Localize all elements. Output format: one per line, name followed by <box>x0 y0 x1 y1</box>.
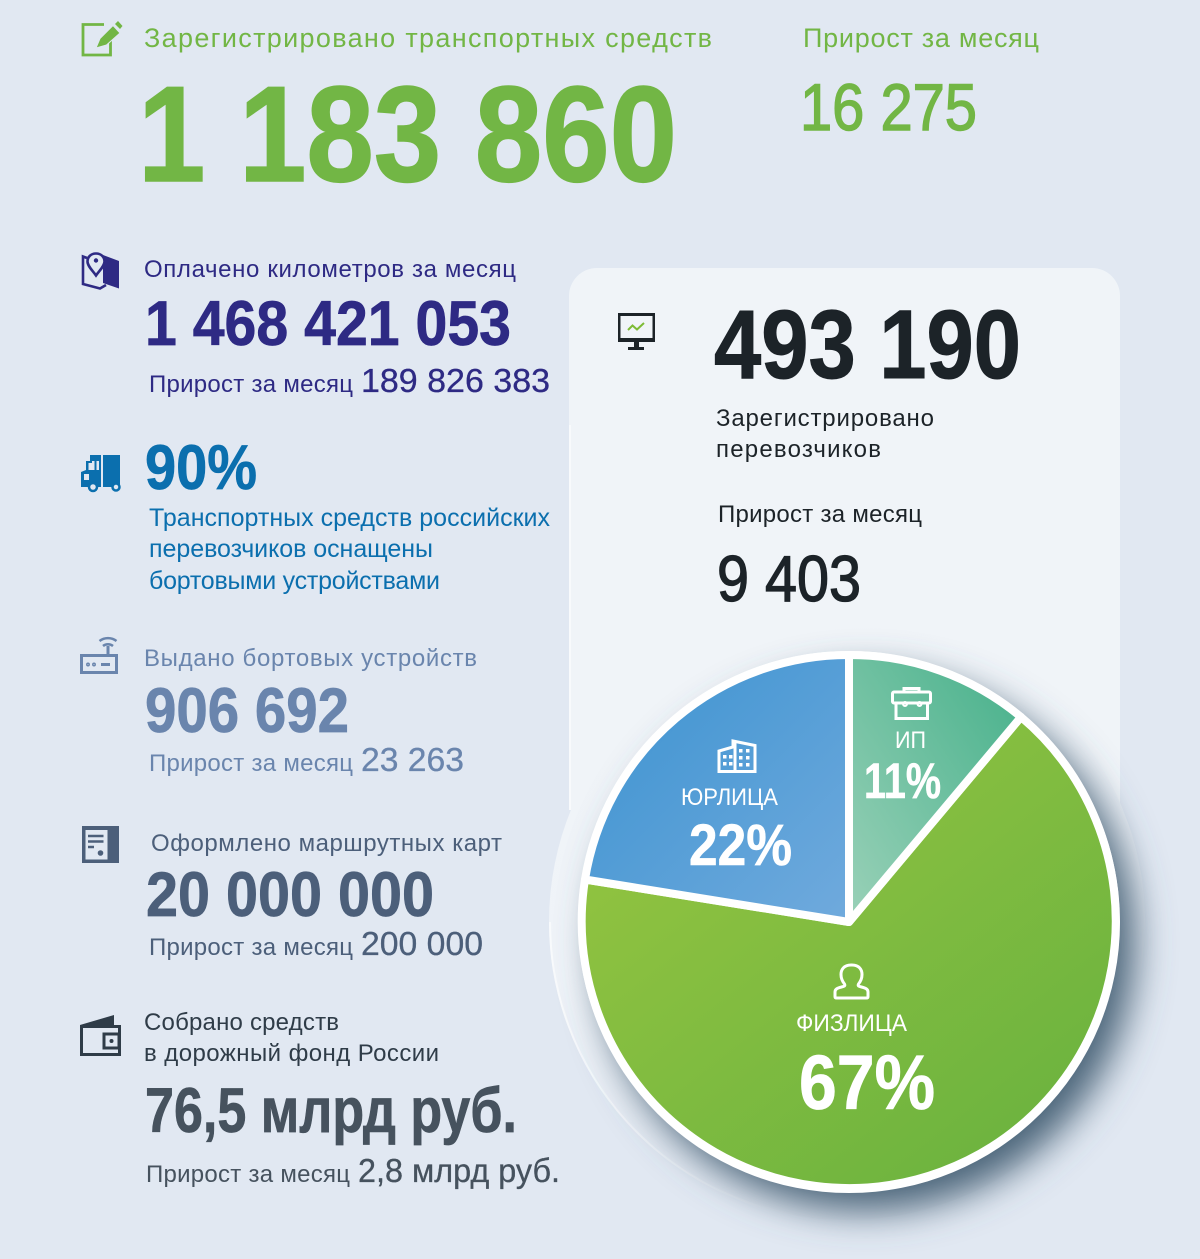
heading: carriers monthly growth: Прирост за месяц <box>718 501 922 528</box>
icon: person <box>835 965 868 998</box>
text: kilometers growth <box>149 362 550 399</box>
number: physical persons: 67% <box>799 1040 935 1126</box>
number: carriers monthly growth: 9 403 <box>717 542 861 615</box>
text: devices growth <box>149 741 464 778</box>
icon: monitor with chart <box>618 313 655 350</box>
icon: map with pin <box>83 254 119 288</box>
text: route cards growth: 200 000 <box>361 925 483 962</box>
text: road fund heading <box>144 1009 439 1067</box>
text: road fund growth: Прирост за месяц <box>146 1161 350 1188</box>
label: physical persons: ФИЗЛИЦА <box>796 1010 907 1037</box>
halo behind pie <box>549 624 1145 1220</box>
text: road fund heading: в дорожный фонд России <box>144 1040 439 1067</box>
icon: pencil and checkbox <box>83 21 122 55</box>
text: equipped description: Транспортных средств российских <box>149 504 550 532</box>
number: equipped share: 90% <box>145 433 257 503</box>
heading: paid kilometers: Оплачено километров за месяц <box>144 256 516 283</box>
icon: wallet <box>80 1015 120 1054</box>
text: devices growth: 23 263 <box>361 741 464 778</box>
number: legal entities: 22% <box>689 813 792 878</box>
text: registered carriers label: Зарегистрировано <box>716 405 934 432</box>
icon: router with wifi <box>82 638 116 672</box>
text: kilometers growth: Прирост за месяц <box>149 371 353 398</box>
number: paid kilometers: 1 468 421 053 <box>145 289 511 359</box>
text: devices growth: Прирост за месяц <box>149 750 353 777</box>
heading: registered vehicles: Зарегистрировано транспортных средств <box>144 23 712 53</box>
label: sole proprietors: ИП <box>895 727 926 754</box>
slice: legal entities <box>585 655 849 922</box>
text: route cards growth: Прирост за месяц <box>149 934 353 961</box>
number: road fund: 76,5 млрд руб. <box>145 1076 517 1146</box>
panel: carriers <box>569 268 1120 810</box>
icon: route document <box>82 826 119 863</box>
text: equipped description: бортовыми устройствами <box>149 567 440 595</box>
number: registered vehicles: 1 183 860 <box>138 58 677 210</box>
icon: buildings <box>719 741 755 772</box>
text: road fund growth: 2,8 млрд руб. <box>358 1152 560 1189</box>
pie white base <box>578 651 1120 1193</box>
text: registered carriers label: перевозчиков <box>716 436 881 463</box>
slice: physical persons <box>582 717 1116 1188</box>
heading: vehicles monthly growth: Прирост за месяц <box>803 23 1039 53</box>
number: registered carriers: 493 190 <box>714 290 1021 399</box>
text: kilometers growth: 189 826 383 <box>361 362 550 399</box>
number: issued devices: 906 692 <box>145 676 349 746</box>
number: route cards: 20 000 000 <box>146 860 434 930</box>
label: legal entities: ЮРЛИЦА <box>681 784 778 811</box>
number: vehicles monthly growth: 16 275 <box>800 70 977 144</box>
chart: carrier types pie <box>549 624 1145 1220</box>
text: road fund heading: Собрано средств <box>144 1009 339 1036</box>
slice: sole proprietors <box>849 655 1021 922</box>
heading: issued devices: Выдано бортовых устройств <box>144 645 477 672</box>
text: road fund growth <box>146 1152 560 1189</box>
text: equipped description: перевозчиков оснащены <box>149 535 433 563</box>
text: registered carriers label <box>716 405 934 463</box>
icon: briefcase <box>892 688 930 718</box>
heading: route cards: Оформлено маршрутных карт <box>151 830 502 857</box>
icon: truck <box>81 455 120 491</box>
number: sole proprietors: 11% <box>864 753 941 809</box>
text: route cards growth <box>149 925 483 962</box>
text: equipped description <box>149 504 550 595</box>
